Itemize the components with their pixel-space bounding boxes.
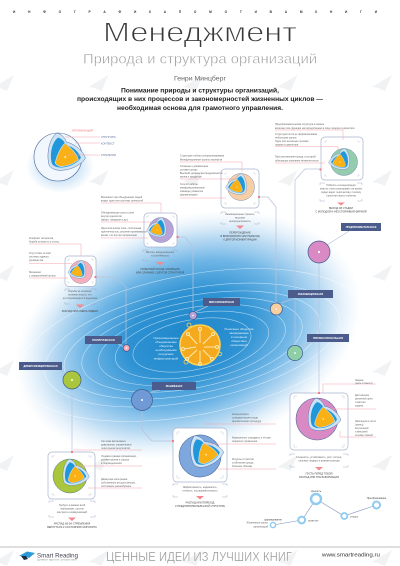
panel: key organisation diagram: ОРГАНИЗАЦИЯ [72,128,93,132]
panel: purple card (missionary): Возникает при объединении людей [101,196,143,199]
panel: magenta card (professional): и внешней [355,430,368,434]
panel: magenta card (professional): Эволюция в сетях [355,420,377,423]
caption: РАСПАД ИЛИ ТРАНСФОРМАЦИЯ [299,476,339,479]
panel: green card (entrepreneurial): включает все функции непосредственно в лице лидера и директора [275,127,355,130]
chart: organisation life cycle: упадок [350,516,359,518]
panel: pink card (political): с определённой целью [29,274,56,278]
panel: pink card (political): Механизм: [29,271,42,274]
sun text left: инфраструктурой [154,356,179,360]
panel: magenta card (professional): рыночной цели [355,398,373,400]
panel: pink card (political): борьба за власть и статус [29,240,60,244]
caption: сильные лидеры и разная культура [298,460,340,462]
connector lines [60,169,349,452]
caption: ВЫХОД ИЗ СТАДИИ [329,207,353,210]
panel: pink card (political) [29,237,99,313]
icon: key sphere [34,133,85,181]
panel: pink card (political): руководства [29,259,44,262]
panel: lime card (diversified) [47,440,142,529]
panel: purple card (missionary): Идеологическая сила, сплочённая [101,227,142,230]
panel: lime card (diversified): Основа в рамках организации, [101,455,137,458]
orbits [6,243,378,447]
caption: КОНЕЧНЫЙ ИСХОД: ИЗОЛЯЦИЯ [140,268,180,271]
label: entrepreneurial [341,223,381,231]
caption [47,501,97,529]
caption: ПЕРЕРОЖДЕНИЕ [229,232,251,234]
sun text left [153,336,179,360]
footer logo: Ценные идеи из лучших книг [37,560,77,562]
footer slogan: ЦЕННЫЕ ИДЕИ ИЗ ЛУЧШИХ КНИГ [106,550,292,564]
author: Генри Минцберг [174,76,227,82]
icon: blue core [175,430,228,481]
caption [315,183,367,214]
top overline: И Н Ф О Г Р А Ф И К А П О М О Т И В А М К Н И Г И [13,10,378,14]
label: professional: ПРОФЕССИОНАЛЬНАЯ [313,336,343,340]
footer url: www.smartreading.ru [321,552,380,558]
panel: key organisation diagram: СТРУКТУРА [101,135,116,139]
label: innovative: ИННОВАЦИОННАЯ [298,292,323,296]
subtitle: Природа и структура организаций [83,50,317,66]
node: innovative [270,303,282,315]
panel: purple card (missionary) [101,196,184,274]
caption: К ДРУГОЙ КОНФИГУРАЦИИ [223,238,257,242]
panel: pink card (political): Конфликт интересов, [29,237,54,240]
panel: lime card (diversified): собственные ресурсы внутри, [101,482,136,484]
panel: blue card (machine): стабильная среда, [232,462,254,464]
label: diversified: ДИВЕРСИФИЦИРОВАННАЯ [23,365,58,368]
caption: С МОЛОДОЙ И НЕУСТОЙЧИВОЙ ФИРМОЙ [315,210,367,214]
lead statement [77,88,324,112]
caption: Эффективность, надёжность, [183,486,218,489]
panel: key organisation diagram: КОНТЕКСТ [101,142,115,146]
label: professional [307,334,349,342]
panel: purple card (missionary): всеми, кто внутри организации [101,234,138,237]
panel: lime card (diversified): условия рынка и спроса [101,458,130,462]
panel: peach card (innovative): формализация [180,194,198,196]
footer logo [19,552,78,562]
panel: peach card (innovative): команды; размытая [180,190,204,193]
chart: organisation life cycle: организаций [253,526,269,528]
panel: blue card (machine) [172,413,276,508]
panel: lime card (diversified): Движущая сила рынка: [101,478,128,481]
panel: magenta card (professional): (цель и смысл) [355,382,373,385]
caption: РАСПАД ИЛИ ПЕРЕХОД [186,502,215,504]
panel: lime card (diversified): Система автономных [101,440,127,443]
chart: organisation life cycle: развитие [308,520,319,522]
panel: green card (entrepreneurial): Структура почти не формализована [275,133,318,136]
panel: magenta card (professional): (конец) [355,424,364,426]
caption: ИЛИ СЛИЯНИЕ С ДРУГОЙ СТРУКТУРОЙ [136,272,184,274]
chart: organisation life cycle: зрелость [311,490,322,493]
panel: lime card (diversified): постоянное разнообразие [101,485,132,488]
caption: Гибкость и концентрация [326,184,356,187]
chart: organisation life cycle: формирование [264,518,282,522]
caption: Борьба за основное [68,290,92,293]
caption [221,212,260,242]
node: entrepreneurial [308,241,330,263]
sun text right: в основном [231,335,247,339]
sun text right: Рыночные общества [225,327,254,331]
caption [290,454,348,479]
panel: key organisation diagram: СТРАТЕГИЯ [101,153,116,157]
panel: peach card (innovative) [180,154,260,242]
panel: blue card (machine): стандартизация труда [232,416,258,420]
panel: purple card (missionary): идентичностью, решения принимаются [101,230,147,234]
caption: ВЕРНУТЬСЯ К СОСТОЯНИЮ МОНОЛИТА [47,526,97,529]
label: machine: МАШИННАЯ [166,384,182,388]
chart: organisation life cycle: Жизненные циклы [247,522,268,524]
panel: peach card (innovative): Высокий уровень неопределённости [180,172,223,175]
panel: magenta card (professional) [290,379,377,479]
caption: точность, последовательность [182,490,218,492]
panel: purple card (missionary): вокруг идеи или системы ценностей [101,200,144,202]
sun text left: ресурсами [159,352,174,356]
caption: Сложность, устойчивость, рост, потери, [296,456,342,459]
panel: green card (entrepreneurial) [275,123,367,214]
node: diversified [63,371,81,389]
panel: peach card (innovative): Способ работы: [180,183,199,186]
panel: peach card (innovative): Сложные и динамичные [180,165,209,168]
panel: green card (entrepreneurial): обитающие компании незначительны [275,160,319,162]
sun text right [225,327,254,347]
caption: Требует в рамках всей [59,504,86,507]
label: diversified [19,362,62,370]
label: machine [152,382,196,390]
panel: magenta card (professional): Задача [355,379,364,382]
panel: peach card (innovative): межфункциональные [180,186,205,190]
icon: peach core [226,174,254,200]
panel: green card (entrepreneurial): Простая внешняя среда, в которой [275,156,316,158]
icon: pink core [68,260,92,284]
label: missionary: МИССИОНЕРСКАЯ [209,300,234,304]
panel: purple card (missionary): Объединяющая сила и цели [101,212,135,214]
icon: magenta core [296,398,341,440]
panel: peach card (innovative): Структура глубоко специализирована [180,154,225,158]
sun text left: объединяющие [155,340,177,344]
panel: purple card (missionary): внутри идеологии [101,215,122,218]
caption [62,289,99,313]
caption: РАСПАД ИЛИ СМЕНА ЛИДЕРА [62,310,99,313]
caption: неопределённость [229,220,252,223]
caption: корпорации, систем [60,508,84,510]
panel: pink card (political): системы единого [29,256,49,258]
panel: green card (entrepreneurial): лидера и директора [275,144,299,146]
sun text right: обществен [231,339,247,343]
caption: высокая [235,216,245,220]
panel: blue card (machine): большие объёмы [232,465,252,468]
sun text right: организаций [230,343,248,347]
label: missionary [203,298,240,306]
caption [136,250,184,274]
panel: key organisation diagram [26,128,116,193]
icon: purple core [147,218,174,242]
panel: lime card (diversified): дивизионов, управляемых [101,444,132,446]
caption: и сплочённость [151,254,170,258]
caption: ПУСТЬ ПЕРЕД ТОБОЙ [306,472,333,476]
lead statement: Понимание природы и структуры организаций, [121,88,279,94]
panel: peach card (innovative): Межфункционные группы экспертов [180,158,223,162]
panel: magenta card (professional): внутренней [355,427,369,430]
panel: peach card (innovative): условия среды [180,168,198,172]
caption: лидер видит перспективу, поэтому [321,191,362,194]
caption: В БЮРОКРАТИЮ ИЛИ ПЕРЕХОД [221,235,260,238]
label: innovative [288,290,333,298]
lead statement: необходимая основа для грамотного управления. [117,105,283,112]
panel: blue card (machine): формализация процедур [232,420,262,423]
footer logo: Smart Reading [37,552,78,560]
sun text right: защищающие [229,331,249,335]
panel: peach card (innovative): рынка и продуктов [180,176,202,178]
chart: organisation life cycle: Преобразование [367,497,387,500]
panel: green card (entrepreneurial): небольшая группа [275,136,297,140]
caption: РАСПАД ИЗ-ЗА СТРЕМЛЕНИЯ [54,522,90,526]
panel: lime card (diversified): через рынок результатов [101,447,131,450]
footer rule [0,546,400,548]
caption: Инновационные проекты, [225,213,255,216]
panel: magenta card (professional): сетевых связей [355,434,374,437]
sun text left: Организационные [153,336,179,340]
caption: влияние власти, что [68,294,92,296]
label: political: ПОЛИТИЧЕСКАЯ [92,338,115,342]
panel: magenta card (professional): задача [355,404,364,408]
sun: operating core [180,323,222,366]
caption: К ПРЕДПРИНИМАТЕЛЬСКОЙ СТРУКТУРЕ [175,505,225,508]
panel: green card (entrepreneurial): Предпринимательская структура в начале [275,123,325,126]
icon: lime core [53,459,89,493]
icon: green core [329,148,358,176]
title: Менеджмент [103,17,297,48]
panel: purple card (missionary): (кредо, традиции и др.) [101,218,128,222]
node: professional [287,345,303,361]
label: political [85,336,122,344]
panel: green card (entrepreneurial): Один или несколько человек [275,140,309,143]
caption: Миссия, воодушевление [146,251,175,254]
panel: pink card (political): Отсутствие чёткой [29,252,51,255]
node: machine [132,390,152,410]
caption: стратегия ясна и понятна [326,194,356,198]
panel: magenta card (professional): и миссии [355,401,366,404]
panel: blue card (machine): иерархия управления [232,440,258,443]
panel: blue card (machine): Формальные стандарты и чёткая [232,436,271,440]
panel: blue card (machine): Ресурсы и простая [232,458,255,461]
label: entrepreneurial: ПРЕДПРИНИМАТЕЛЬСКАЯ [346,226,377,229]
caption [173,484,227,508]
panel: blue card (machine): Концентрация, [232,413,250,416]
caption: не сопровождается ведением [63,297,98,300]
chart: organisation life cycle [247,490,387,528]
sun text left: общества [159,344,173,348]
sun text left: необходимыми [155,348,177,352]
node: missionary [189,312,197,320]
caption: контроля и коммуникаций [57,511,88,514]
node: political [123,345,130,351]
panel: lime card (diversified): в подразделениях [101,462,123,465]
lead statement: происходящих в них процессов и закономерностей жизненных циклов — [77,96,324,103]
panel: magenta card (professional): Достижение [355,394,370,397]
caption: власти; легко реагировать на рынок [320,188,363,190]
